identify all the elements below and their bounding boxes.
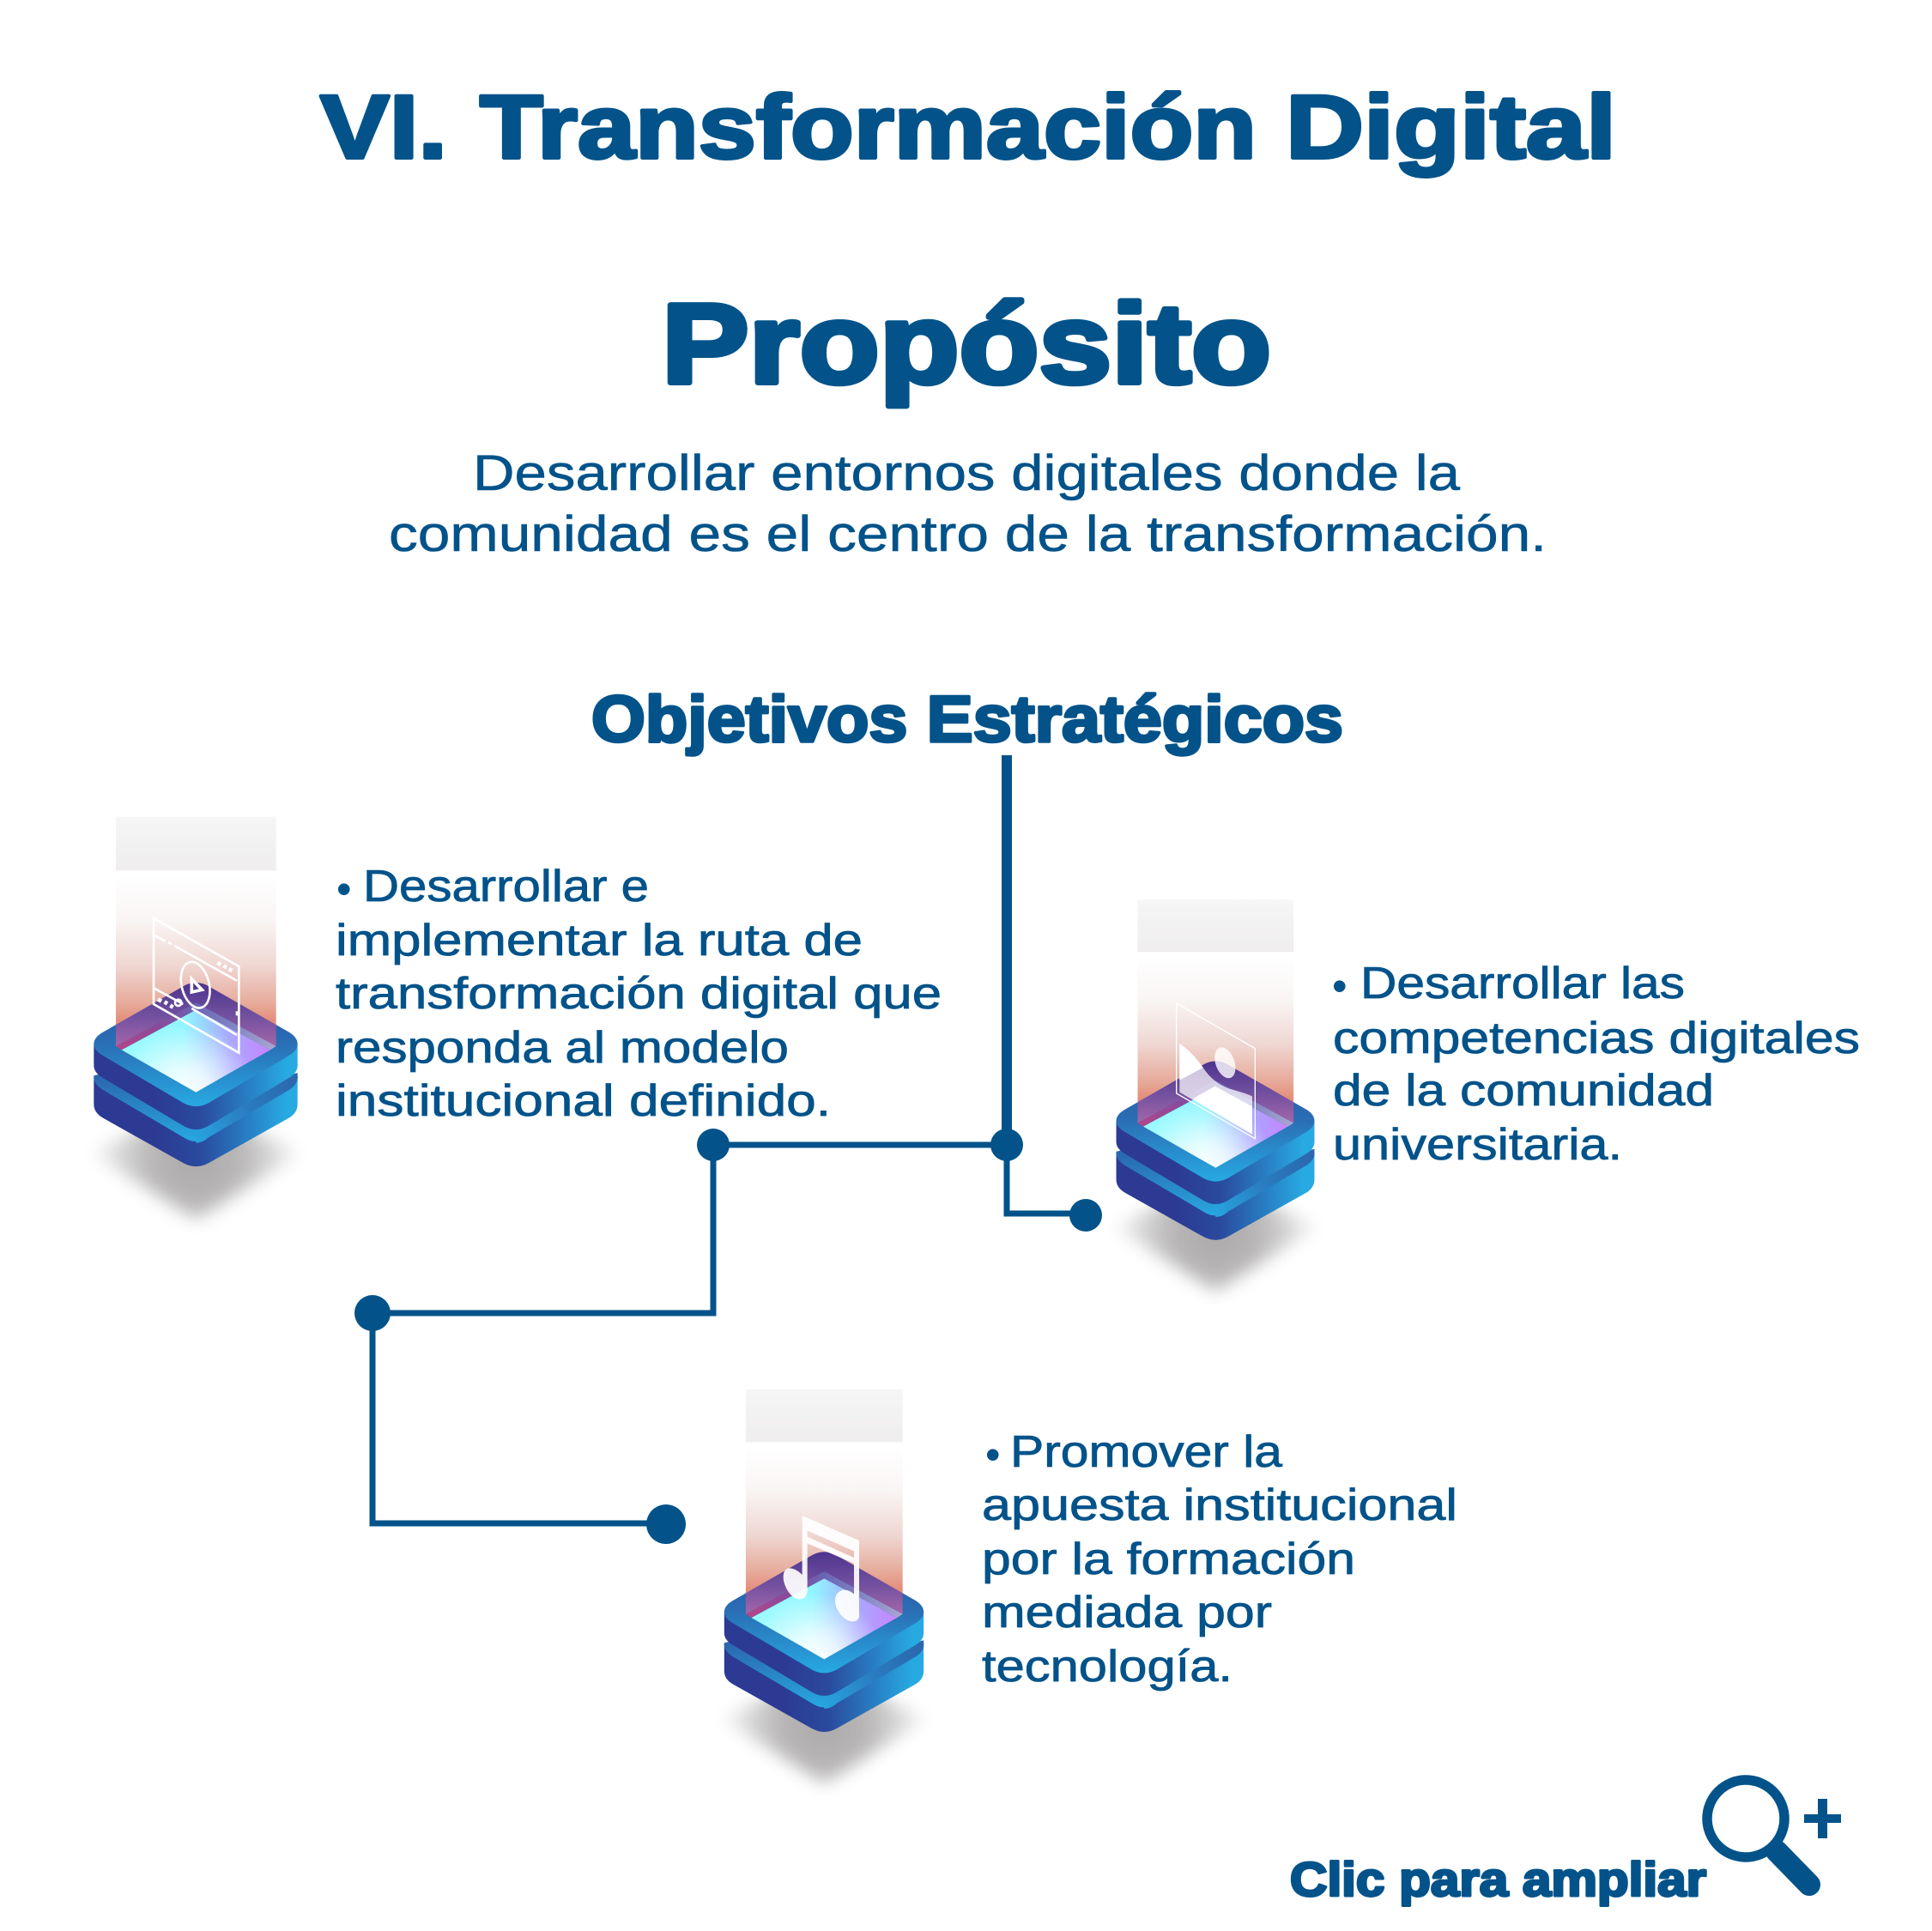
text: objective 2: de la comunidad — [1333, 1066, 1714, 1116]
text: objective 1: implementar la ruta de — [336, 916, 863, 966]
text: objective 3: apuesta institucional — [982, 1480, 1457, 1530]
icon: video platform — [92, 817, 300, 1220]
connector lines — [354, 755, 1102, 1544]
text: objective 1: institucional definido. — [336, 1076, 831, 1126]
text: objective 2: universitaria. — [1333, 1120, 1622, 1170]
heading: objetivos estratégicos: Objetivos Estratégicos — [591, 683, 1343, 756]
text: objective 2: competencias digitales — [1333, 1014, 1860, 1063]
text: objective 3 — [982, 1427, 1457, 1692]
text: objective 1: Desarrollar e — [363, 862, 649, 911]
text: objective 2: • — [1332, 962, 1348, 1010]
icon: magnifier plus — [1707, 1780, 1841, 1885]
icon: video window — [154, 918, 239, 1053]
text: objective 2: Desarrollar las — [1360, 959, 1685, 1008]
purpose statement: Desarrollar entornos digitales donde la — [473, 445, 1461, 501]
purpose statement — [389, 445, 1547, 562]
title: Digital — [1286, 77, 1616, 178]
text: objective 1 — [336, 862, 942, 1126]
icon: music platform — [722, 1389, 926, 1784]
title: VI. — [320, 77, 447, 178]
text: objective 3: tecnología. — [982, 1642, 1232, 1692]
purpose statement: comunidad es el centro de la transformación. — [389, 506, 1547, 562]
text: objective 1: transformación digital que — [336, 969, 942, 1019]
text: objective 3: Promover la — [1010, 1427, 1282, 1477]
heading: propósito: Propósito — [662, 281, 1271, 407]
title — [320, 77, 1616, 178]
icon: image platform — [1114, 899, 1317, 1292]
icon: music notes — [784, 1516, 859, 1621]
text: objective 1: responda al modelo — [336, 1023, 789, 1073]
text: objective 3: • — [985, 1431, 1001, 1479]
icon: image card — [1177, 1003, 1255, 1139]
text: objective 2 — [1332, 959, 1860, 1170]
label: clic para ampliar: Clic para ampliar — [1290, 1852, 1706, 1906]
text: objective 3: por la formación — [982, 1535, 1355, 1584]
text: objective 1: • — [336, 865, 352, 913]
text: objective 3: mediada por — [982, 1588, 1272, 1637]
title: Transformación — [480, 77, 1257, 178]
